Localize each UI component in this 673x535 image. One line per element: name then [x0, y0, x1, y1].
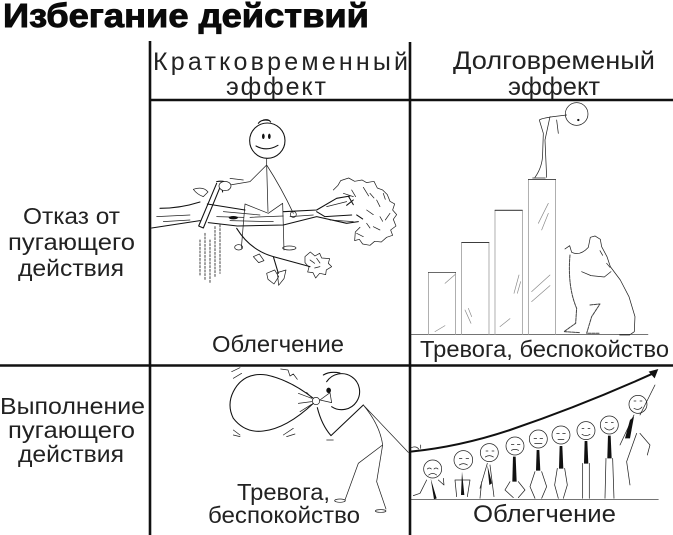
trunk: [152, 202, 200, 228]
figure 7: [577, 422, 595, 440]
row heading: refusing the scary action: действия: [18, 255, 124, 281]
figure 3: [480, 444, 498, 462]
column heading: long-term effect: эффект: [508, 73, 601, 101]
row heading: refusing the scary action: Отказ от: [23, 203, 120, 229]
figure 9: [629, 395, 647, 413]
row heading: doing the scary action: Выполнение: [0, 393, 145, 419]
figure 6: [552, 426, 570, 444]
column heading: long-term effect: [453, 47, 655, 101]
caption: [208, 479, 360, 528]
bear: [565, 236, 635, 335]
illustration: bars, man and bear: [411, 103, 648, 335]
panel: man sawing the branch: [152, 120, 397, 357]
caption: Облегчение: [473, 501, 616, 528]
lower twig with leaves: [237, 228, 310, 273]
caption: Тревога, беспокойство: [420, 336, 669, 362]
row heading: doing the scary action: пугающего: [8, 417, 135, 443]
panel: man inflating a balloon: [208, 368, 408, 528]
row heading: refusing the scary action: [8, 203, 135, 281]
figure 4: [506, 437, 524, 455]
figure 2: [454, 451, 473, 469]
column heading: short-term effect: Кратковременный: [153, 48, 408, 76]
panel: growth of nine businessmen: [411, 369, 658, 528]
illustration: figures and rising arrow: [411, 369, 658, 499]
row heading: doing the scary action: действия: [18, 441, 124, 467]
illustration: stick figure on branch: [152, 120, 397, 285]
figure 8: [600, 416, 618, 434]
column heading: short-term effect: эффект: [226, 73, 327, 101]
falling sawdust: [200, 225, 220, 283]
caption: Тревога,: [237, 479, 330, 505]
row heading: refusing the scary action: пугающего: [8, 229, 135, 255]
panel: anxiety grows, bar chart and bear: [411, 103, 669, 362]
foliage: [333, 178, 397, 245]
saw: [199, 183, 220, 228]
column heading: short-term effect: [153, 48, 408, 101]
illustration: balloon and stick figure: [230, 368, 408, 512]
column heading: long-term effect: Долговременый: [453, 47, 655, 75]
caption: Облегчение: [212, 331, 344, 357]
figure 5: [529, 430, 547, 448]
caption: беспокойство: [208, 502, 360, 528]
row heading: doing the scary action: [0, 393, 145, 467]
figure 1: [424, 460, 442, 478]
